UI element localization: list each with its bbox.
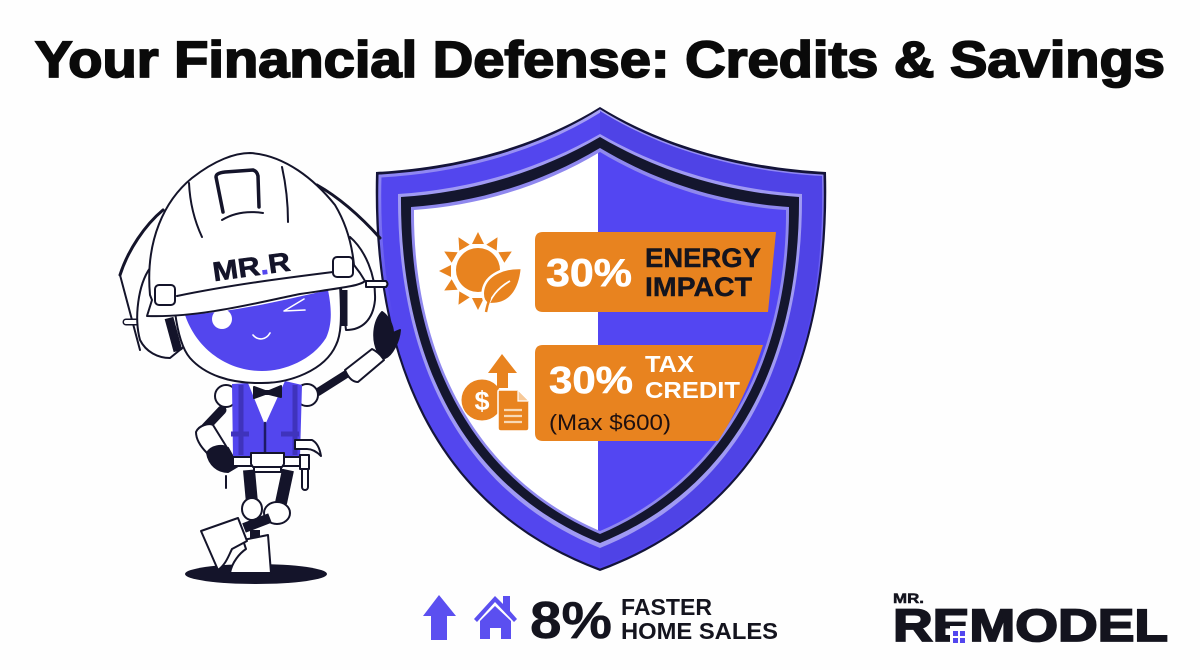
icon: money and document xyxy=(462,354,529,431)
helmet straps xyxy=(120,185,380,350)
energy banner: 30% xyxy=(546,252,632,295)
energy banner xyxy=(535,232,776,312)
wink xyxy=(284,299,305,311)
hammer xyxy=(295,440,321,490)
logo: Mr. Remodel xyxy=(893,590,1168,651)
icon: money and document: $ xyxy=(474,386,490,416)
tax credit banner: 30% xyxy=(549,360,633,402)
icon: sun and leaf xyxy=(439,232,522,312)
energy banner: IMPACT xyxy=(645,272,753,302)
helmet logo: MR.R xyxy=(211,247,292,287)
icon: up arrow xyxy=(423,595,456,640)
tax credit banner: CREDIT xyxy=(645,377,740,403)
legs and feet xyxy=(185,470,327,584)
logo: Mr. Remodel: MR. xyxy=(893,590,924,606)
energy banner: ENERGY xyxy=(645,243,761,273)
title: Your Financial Defense: Credits & Savings xyxy=(35,31,1165,88)
neck and arms xyxy=(196,312,400,488)
label: FASTER xyxy=(621,594,712,620)
ground shadow xyxy=(185,564,327,584)
helmet xyxy=(147,153,365,383)
icon: house xyxy=(474,596,517,639)
stat: faster home sales: HOME SALES xyxy=(621,618,778,644)
tax credit banner: TAX xyxy=(645,351,695,377)
robot character xyxy=(120,153,400,584)
logo: Mr. Remodel: REMODEL xyxy=(893,600,1168,651)
bow tie xyxy=(254,386,281,398)
tax credit banner: (Max $600) xyxy=(549,410,671,435)
eye xyxy=(212,309,232,329)
percentage: 8% xyxy=(530,592,612,650)
ear muffs xyxy=(137,237,388,358)
shield panel xyxy=(376,107,826,571)
smile xyxy=(253,333,270,339)
vest xyxy=(231,381,302,457)
stat: faster home sales xyxy=(423,592,778,650)
tax credit banner xyxy=(535,345,763,441)
tool belt xyxy=(233,453,305,472)
face screen xyxy=(185,290,331,371)
